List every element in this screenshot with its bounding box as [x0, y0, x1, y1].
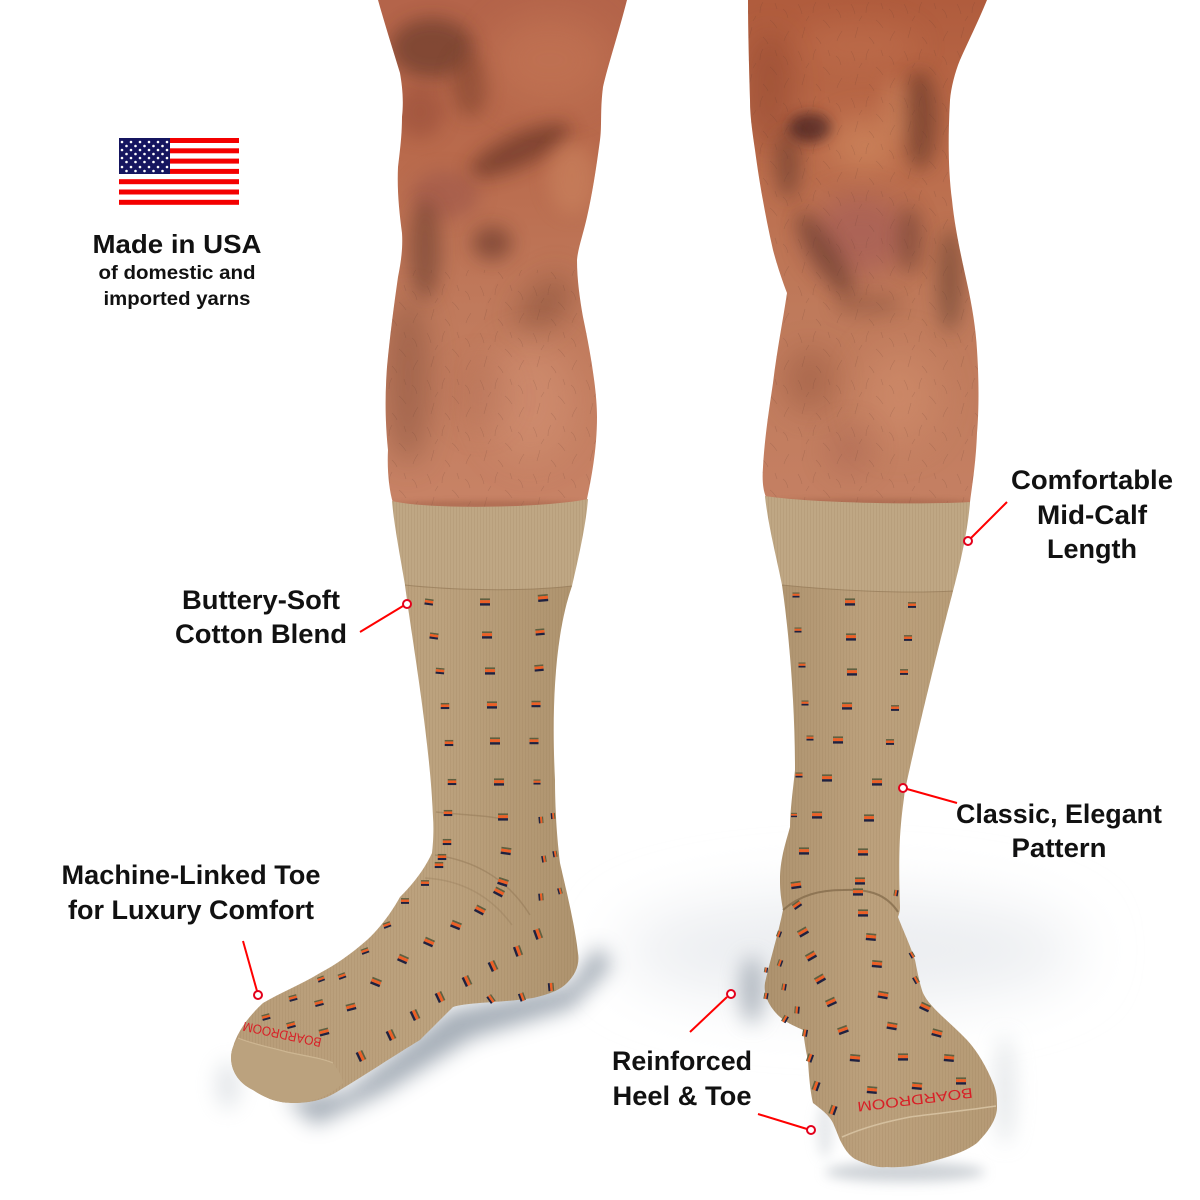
callout: machine-linked toe: [62, 860, 320, 999]
callout: mid-calf length: Comfortable: [1011, 465, 1173, 495]
callout: cotton blend: Buttery-Soft: [182, 585, 340, 615]
left sock: [231, 499, 588, 1103]
callout: reinforced heel and toe: Reinforced: [612, 1046, 752, 1076]
callout: elegant pattern: Classic, Elegant: [956, 799, 1162, 829]
callout: elegant pattern: Pattern: [1012, 833, 1106, 863]
left cuff: [392, 499, 588, 590]
callout: machine-linked toe: for Luxury Comfort: [68, 895, 314, 925]
right sock pattern: [763, 592, 966, 1115]
left sock pattern: [261, 594, 563, 1062]
callout: cotton blend: Cotton Blend: [175, 619, 347, 649]
made in USA text: Made in USA: [92, 229, 262, 259]
made in USA text: of domestic and: [98, 263, 256, 284]
right brand text: BOARDROOM: [856, 1085, 974, 1115]
callout: cotton blend: [175, 585, 411, 649]
made in USA text: imported yarns: [104, 289, 250, 310]
callout: reinforced heel and toe: [612, 990, 815, 1134]
callout: reinforced heel and toe: Heel & Toe: [612, 1081, 752, 1111]
left toe seam: [231, 1038, 343, 1103]
right cuff: [765, 496, 970, 592]
right toe seam: [842, 1106, 996, 1137]
right leg: [748, 0, 987, 504]
left leg: [370, 0, 640, 516]
callout: mid-calf length: [964, 465, 1173, 564]
floor shadows: [216, 895, 1080, 1182]
callout: mid-calf length: Mid-Calf: [1037, 500, 1148, 530]
right sock: [765, 496, 997, 1167]
made in USA text: [92, 229, 262, 310]
callout: mid-calf length: Length: [1047, 534, 1137, 564]
US flag icon: [119, 138, 239, 205]
callout: elegant pattern: [899, 784, 1162, 863]
callout: machine-linked toe: Machine-Linked Toe: [62, 860, 320, 890]
left brand text: BOARDROOM: [241, 1019, 323, 1050]
